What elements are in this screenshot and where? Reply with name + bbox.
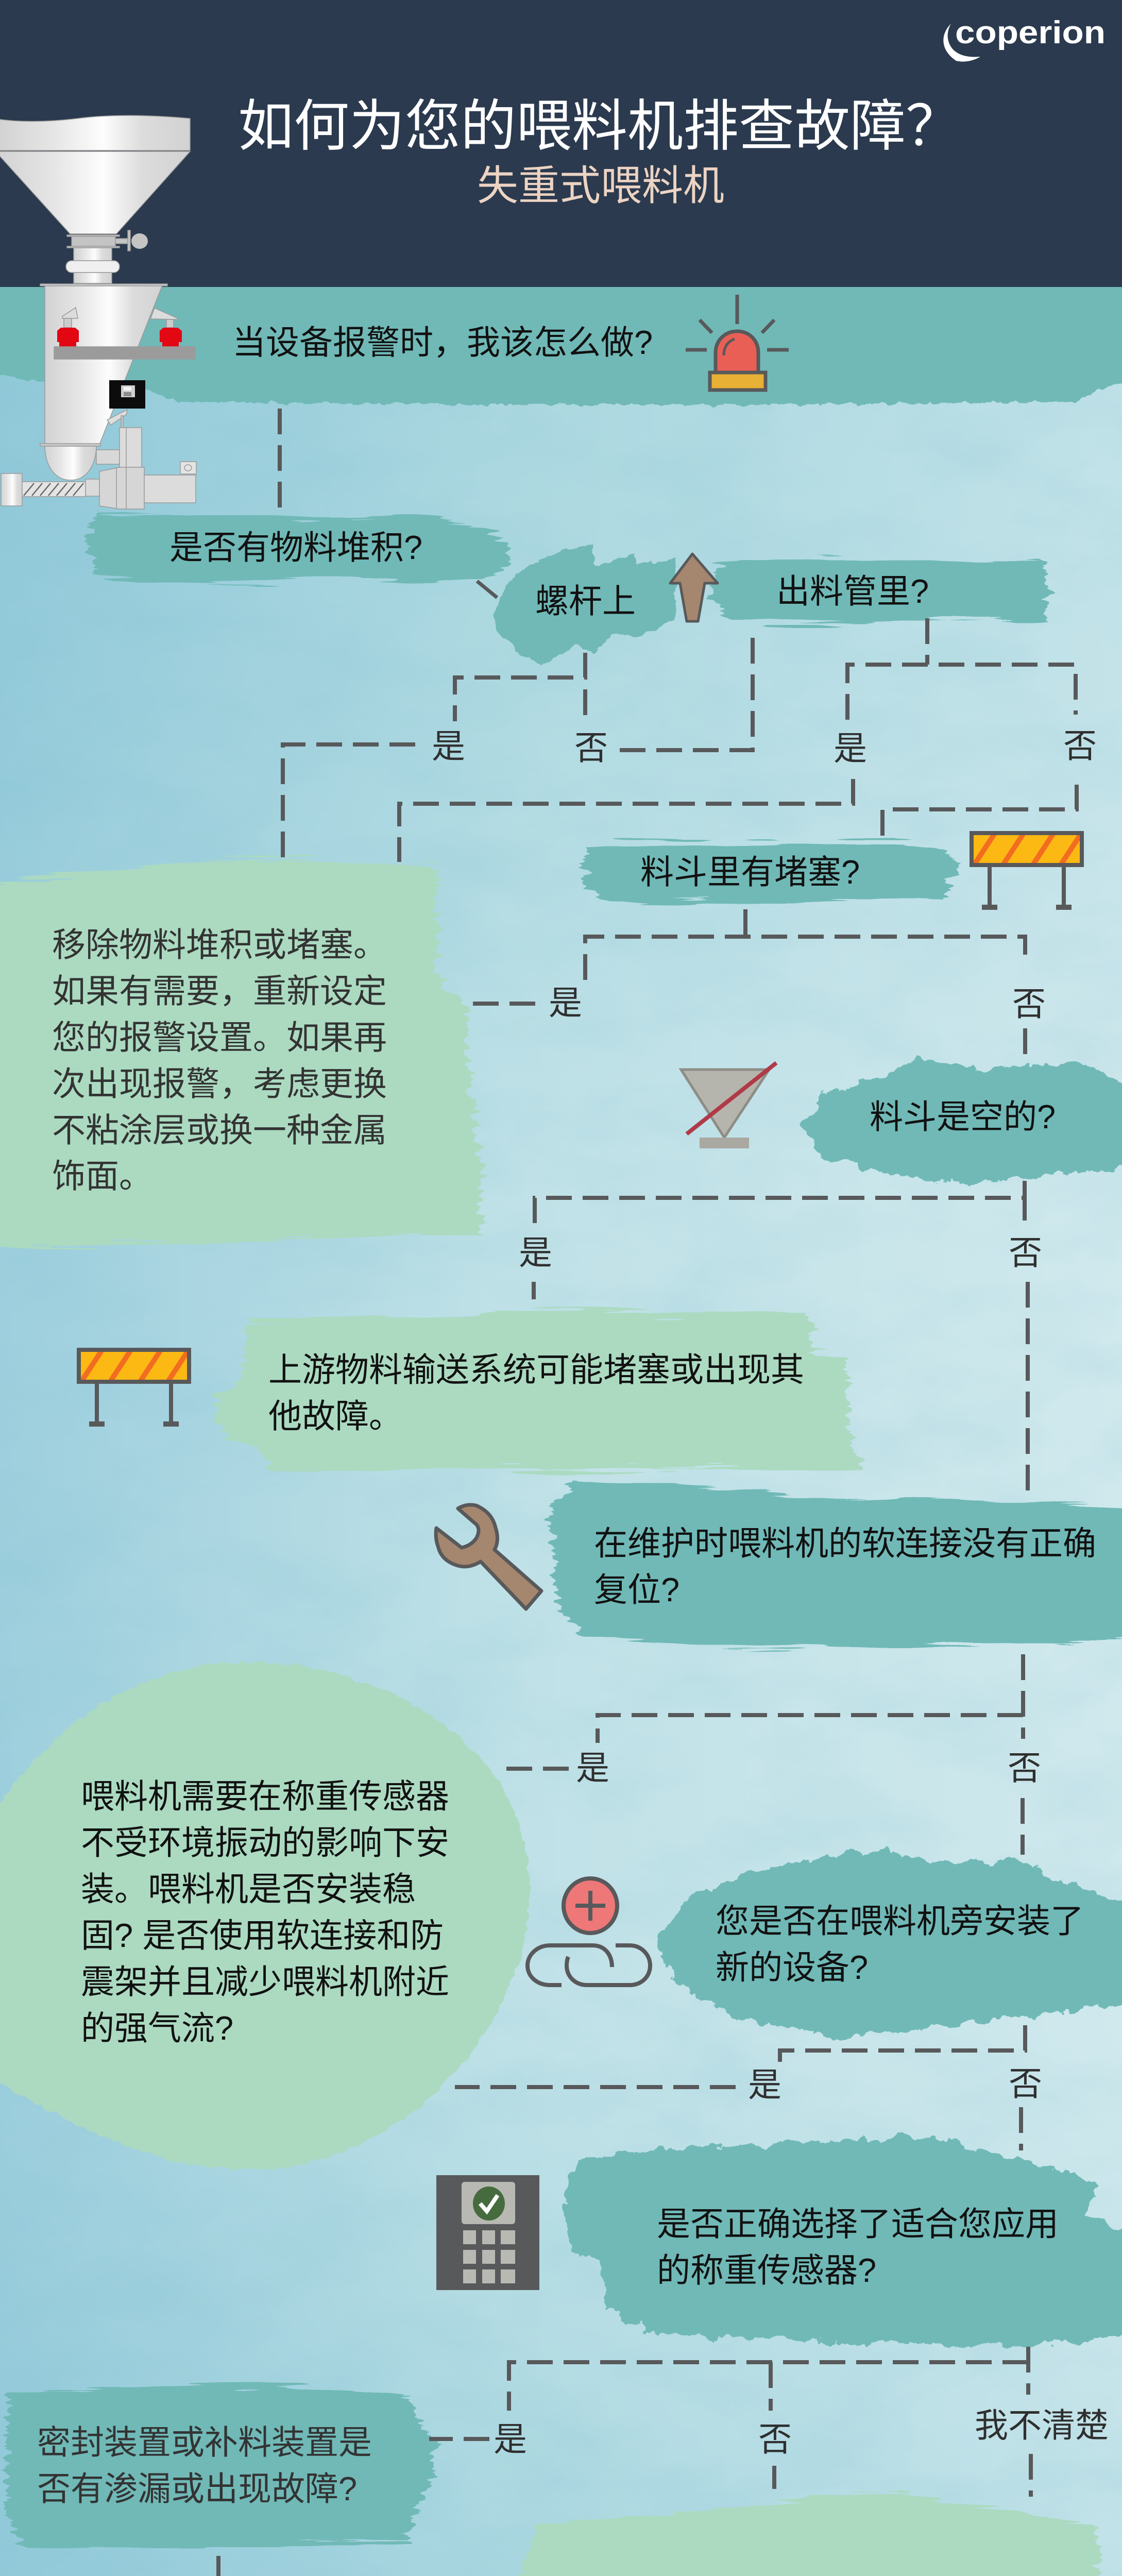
yes-no labels: 否 [1012, 985, 1046, 1023]
panel: flexible connection reset: 在维护时喂料机的软连接没有正确 [594, 1524, 1096, 1562]
connector: blockage split [585, 937, 1025, 980]
icon: keypad check [436, 2175, 539, 2290]
drive assembly [107, 410, 127, 425]
connector: screw yes to remove panel [283, 744, 415, 859]
connector: load cell stem [1026, 2347, 1030, 2395]
panel: new equipment nearby: 您是否在喂料机旁安装了 [716, 1902, 1084, 1940]
panel: upstream conveying: 他故障。 [268, 1397, 402, 1435]
connector: flexible connection yes branch [598, 1715, 1023, 1743]
connector: flexible yes to vibration [505, 1767, 569, 1771]
connector: build-up to screw [477, 581, 497, 598]
panel: seal or refill device [5, 2385, 440, 2550]
connector: screw split yes [455, 653, 585, 721]
yes-no labels: 否 [758, 2420, 792, 2458]
connector: equipment no to load cell [1019, 2107, 1023, 2150]
icon: feeder machine [0, 115, 196, 509]
weigh hopper body [45, 285, 162, 445]
controller box [109, 380, 145, 409]
connector: discharge pipe stem [925, 618, 929, 665]
alarm question text: 当设备报警时，我该怎么做? [232, 324, 653, 361]
panel: remove build-up: 您的报警设置。如果再 [52, 1019, 387, 1056]
connector: blockage stem [743, 909, 747, 937]
panel: in the discharge pipe: 出料管里? [776, 572, 929, 610]
panel: remove build-up: 不粘涂层或换一种金属 [52, 1111, 387, 1149]
hopper top [0, 115, 190, 150]
yes-no labels: 是 [432, 727, 465, 765]
panel: load cell selection [562, 2137, 1122, 2347]
panel: load cell selection: 是否正确选择了适合您应用 [657, 2205, 1059, 2243]
title: 如何为您的喂料机排查故障？ [238, 95, 961, 157]
panel: remove build-up: 饰面。 [52, 1157, 152, 1195]
yes-no labels [46, 727, 1109, 2576]
panel: vibration advice: 装。喂料机是否安装稳 [81, 1870, 416, 1908]
panel: seal or refill device: 否有渗漏或出现故障? [37, 2470, 357, 2507]
connector: discharge pipe split [847, 665, 1076, 720]
connector: load cell yes to seal [429, 2437, 489, 2441]
connector: pipe no to hopper blockage [882, 785, 1077, 838]
connector: load cell no branch [769, 2362, 773, 2411]
connector: load cell no down [772, 2466, 776, 2489]
screw conveyor [22, 482, 86, 497]
yes-no labels: 是 [494, 2420, 527, 2458]
connector: blockage yes to remove panel [471, 1002, 535, 1006]
panel: load cell selection: 的称重传感器? [657, 2251, 876, 2289]
panel: on the screw: 螺杆上 [535, 582, 636, 620]
yes-no labels: 是 [549, 984, 582, 1022]
hopper cone [0, 151, 190, 234]
yes-no labels: 是 [576, 1749, 609, 1787]
panel: upstream conveying [215, 1311, 862, 1471]
panel: in the discharge pipe [713, 559, 1048, 622]
connector: alarm to build-up question [278, 409, 282, 509]
panel: vibration advice: 不受环境振动的影响下安 [81, 1824, 449, 1861]
panel: vibration advice: 震架并且减少喂料机附近 [81, 1963, 449, 2001]
connector: hopper empty stem [1023, 1181, 1027, 1198]
panel: is there material build-up: 是否有物料堆积? [169, 529, 422, 566]
connector: screw split no [583, 689, 587, 716]
connector: flexible connection stem [1021, 1654, 1025, 1739]
panel: blockage in hopper [585, 842, 959, 904]
connector: load cell yes branch [509, 2362, 1028, 2411]
connector: seal stem [216, 2556, 220, 2576]
yes-no labels: 否 [1008, 1749, 1041, 1787]
panel: check resolution [501, 2493, 1122, 2576]
yes-no labels: 否 [1009, 1234, 1042, 1272]
panel: blockage in hopper: 料斗里有堵塞? [640, 853, 860, 891]
logo: coperion header [943, 15, 1106, 62]
yes-no labels: 否 [1063, 727, 1097, 765]
connector: hopper empty split [535, 1198, 1025, 1227]
panel: remove build-up: 移除物料堆积或堵塞。 [52, 926, 387, 963]
bellows [66, 248, 120, 283]
yes-no labels: 是 [519, 1234, 552, 1272]
icon: up arrow [670, 554, 718, 621]
panel: vibration advice: 的强气流? [81, 2009, 233, 2047]
yes-no labels: 是 [748, 2066, 781, 2104]
icon: barrier top [972, 833, 1082, 910]
icon: empty hopper [681, 1063, 776, 1148]
panel: vibration advice [0, 1662, 530, 2170]
panel: remove build-up [0, 860, 482, 1247]
panel: remove build-up: 如果有需要，重新设定 [52, 972, 387, 1010]
connector: blockage no to hopper empty [1023, 1028, 1027, 1055]
panel: new equipment nearby [659, 1850, 1122, 2038]
panel: is there material build-up [84, 515, 510, 583]
panel: flexible connection reset [551, 1481, 1122, 1649]
connector: flexible no to new equipment [1021, 1798, 1025, 1855]
flange and knob [67, 230, 148, 251]
panel: vibration advice: 喂料机需要在称重传感器 [81, 1777, 449, 1815]
icon: barrier lower [79, 1350, 189, 1427]
connector: pipe yes to remove panel [399, 779, 853, 862]
connector: unsure down [1029, 2454, 1033, 2497]
connector: no back up to discharge pipe [620, 630, 753, 750]
panel: vibration advice: 固? 是否使用软连接和防 [81, 1917, 444, 1954]
panel: hopper empty: 料斗是空的? [870, 1098, 1056, 1136]
icon: add equipment link [528, 1878, 650, 1985]
logo: coperion header: coperion [955, 15, 1106, 50]
subtitle: 失重式喂料机 [477, 163, 724, 209]
connector: empty yes to upstream [532, 1282, 536, 1299]
icon: wrench [436, 1505, 541, 1609]
yes-no labels: 否 [1009, 2065, 1042, 2103]
panel: hopper empty [804, 1058, 1122, 1184]
teal band: alarm question background [0, 278, 1122, 405]
load cells [57, 308, 182, 347]
panel: remove build-up: 次出现报警，考虑更换 [52, 1065, 387, 1103]
connector: equipment yes to vibration [455, 2085, 736, 2089]
icon: alarm light [686, 295, 789, 390]
connector: new equipment split [780, 2025, 1025, 2067]
yes-no labels: 我不清楚 [975, 2406, 1109, 2444]
panel: flexible connection reset: 复位? [594, 1571, 679, 1608]
connector: empty no to flexible connection [1026, 1282, 1030, 1490]
panel: seal or refill device: 密封装置或补料装置是 [37, 2424, 372, 2461]
header bar [0, 0, 1122, 287]
yes-no labels: 否 [574, 729, 608, 767]
panel: new equipment nearby: 新的设备? [716, 1948, 868, 1986]
panel: upstream conveying: 上游物料输送系统可能堵塞或出现其 [268, 1351, 804, 1388]
yes-no labels: 是 [834, 730, 867, 767]
panel: on the screw [494, 544, 676, 666]
